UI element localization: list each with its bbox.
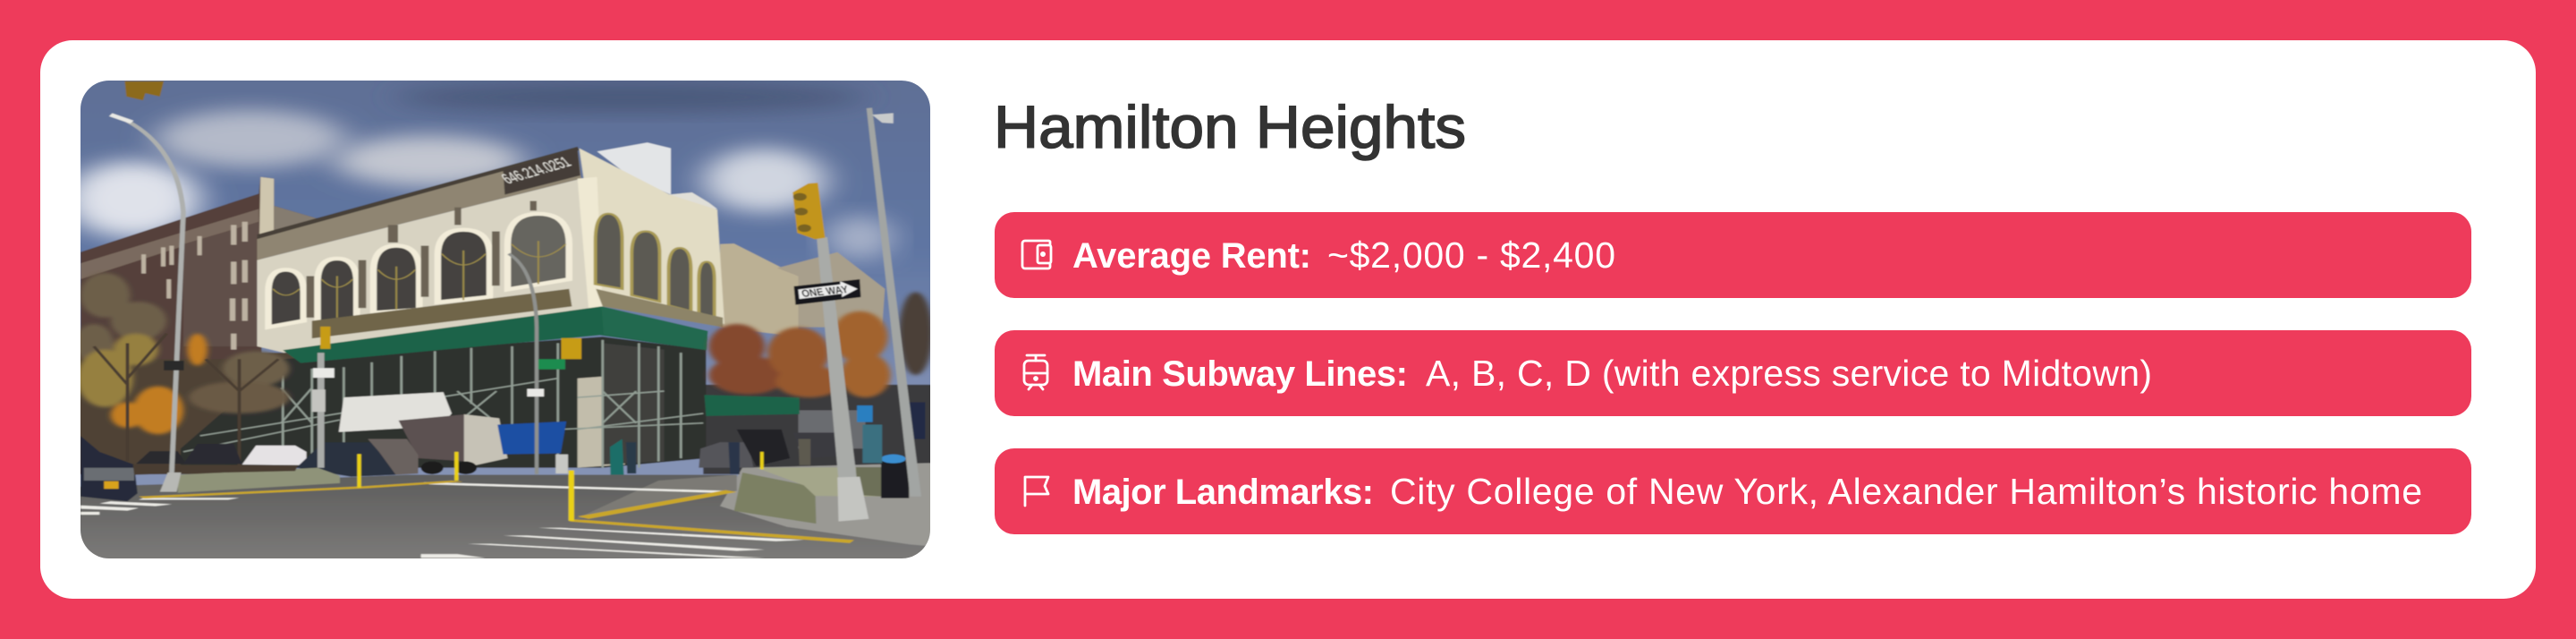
trees left — [74, 273, 290, 434]
front arches — [268, 214, 569, 328]
road — [80, 474, 926, 558]
side arches — [596, 214, 715, 320]
white tarp, truck and blue tarp — [339, 392, 452, 432]
concrete barriers right — [734, 467, 882, 524]
kiosk — [862, 424, 882, 463]
car: foreground suv — [80, 436, 138, 501]
sign: one way: ONE WAY — [800, 284, 850, 300]
left brick building — [80, 177, 275, 354]
concrete planter left — [178, 468, 340, 493]
green sidewalk shed — [283, 306, 708, 363]
row: main subway lines — [995, 330, 2471, 416]
rear penthouse — [597, 142, 671, 194]
row background — [995, 212, 2471, 298]
crosswalks and lane markings — [80, 482, 804, 558]
under-shed dark storefront — [181, 337, 706, 468]
carved ornaments — [306, 201, 537, 318]
sign: one way — [794, 279, 860, 305]
heading: Hamilton Heights — [994, 94, 1466, 161]
hanging traffic light top left — [124, 81, 164, 100]
sidewalk right — [720, 463, 948, 548]
right tan building — [720, 243, 798, 337]
row: average rent — [995, 212, 2471, 298]
photo: Hamilton Heights street corner — [66, 72, 948, 573]
trees right — [708, 292, 932, 397]
row background — [995, 330, 2471, 416]
yellow bollards — [357, 452, 764, 521]
lower background: far left and far right street level — [72, 353, 295, 474]
row: major landmarks — [995, 448, 2471, 534]
traffic pole right with signal and one way sign — [792, 183, 869, 522]
cars — [80, 430, 837, 501]
icon: wallet — [1022, 241, 1051, 268]
main building front face — [258, 179, 600, 353]
sign: phone number banner: 646.214.0251 — [497, 154, 575, 187]
main building parapet — [258, 149, 581, 260]
label: average rent: Average Rent: — [1072, 236, 1311, 276]
tree branches left — [94, 334, 278, 471]
label: subway lines: Main Subway Lines: — [1072, 354, 1408, 394]
value: rent range: ~$2,000 - $2,400 — [1327, 234, 1615, 276]
label: landmarks: Major Landmarks: — [1072, 473, 1374, 512]
value: landmarks: City College of New York, Alexander Hamilton’s historic home — [1390, 471, 2422, 512]
icon: tram — [1024, 355, 1047, 389]
tall lamp post right — [867, 107, 921, 497]
centre pole with signal — [164, 253, 581, 474]
lower frieze — [312, 289, 572, 338]
value: subway lines: A, B, C, D (with express service to Midtown) — [1426, 353, 2152, 394]
icon: flag — [1025, 477, 1048, 506]
main building side face — [580, 149, 724, 324]
scaffolding — [183, 340, 703, 468]
window tracery — [273, 241, 565, 318]
trash can — [881, 462, 909, 498]
sky — [80, 81, 930, 487]
row background — [995, 448, 2471, 534]
street lamp left — [111, 115, 183, 491]
pedestrians — [610, 439, 810, 475]
